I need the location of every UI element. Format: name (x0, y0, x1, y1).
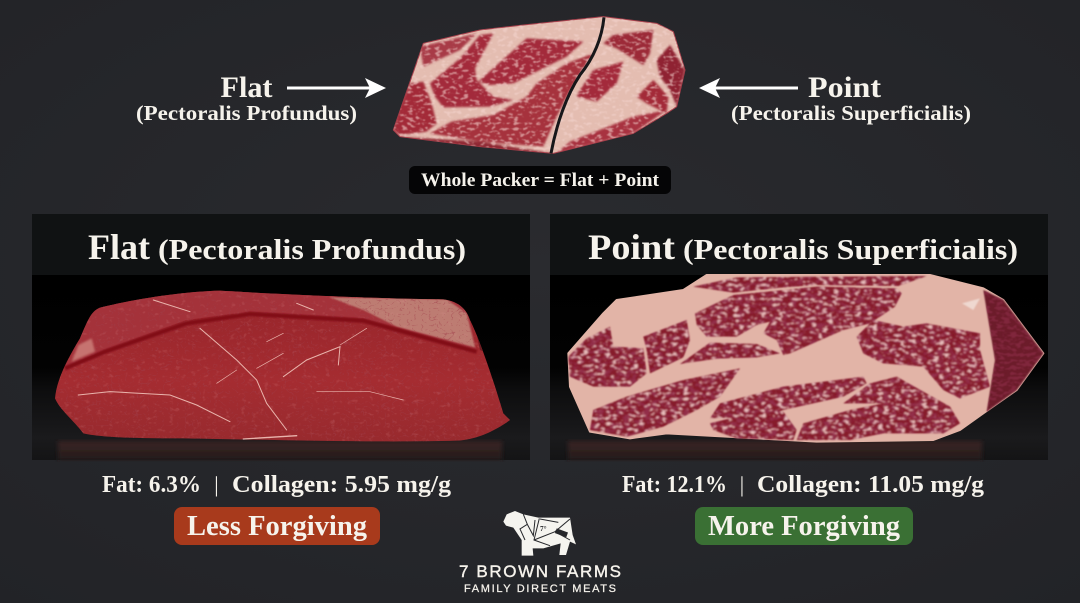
heading: point (588, 227, 1018, 267)
icon: cow (503, 511, 576, 556)
heading: flat (88, 227, 466, 267)
heading: flat: (Pectoralis Profundus) (158, 235, 466, 266)
stats: point: | (740, 472, 744, 497)
label: flat (136, 71, 357, 125)
badge: less forgiving: Less Forgiving (187, 511, 367, 542)
stats: point (622, 472, 984, 498)
stats: flat: Fat: 6.3% (102, 472, 201, 498)
label: point: Point (808, 71, 881, 104)
arrow: point to brisket (699, 78, 798, 98)
panel: point (550, 214, 1050, 460)
label: flat: (Pectoralis Profundus) (136, 101, 357, 125)
whole brisket image (392, 16, 686, 154)
badge: less forgiving (174, 507, 380, 545)
whole packer caption: Whole Packer = Flat + Point (421, 170, 660, 191)
stats: flat: Collagen: 5.95 mg/g (232, 472, 451, 498)
photo: flat cut (55, 290, 510, 442)
stats: flat (102, 472, 451, 498)
label: point (731, 71, 971, 125)
heading: point: Point (588, 227, 675, 267)
heading: point: (Pectoralis Superficialis) (683, 235, 1018, 266)
arrow: flat to brisket (287, 78, 386, 98)
photo: point cut (567, 274, 1044, 443)
panel: flat (30, 214, 530, 460)
logo: 7 brown farms (459, 511, 621, 595)
badge: more forgiving: More Forgiving (708, 511, 900, 542)
heading: flat: Flat (88, 227, 150, 267)
label: flat: Flat (220, 71, 273, 104)
whole packer caption (409, 166, 671, 194)
logo: 7 brown farms: FAMILY DIRECT MEATS (464, 583, 616, 595)
logo: 7 brown farms: 7 BROWN FARMS (459, 562, 621, 581)
icon: cow: 7° (540, 524, 547, 533)
stats: point: Fat: 12.1% (622, 472, 727, 498)
label: point: (Pectoralis Superficialis) (731, 101, 971, 125)
stats: point: Collagen: 11.05 mg/g (757, 472, 984, 498)
stats: flat: | (214, 472, 219, 497)
